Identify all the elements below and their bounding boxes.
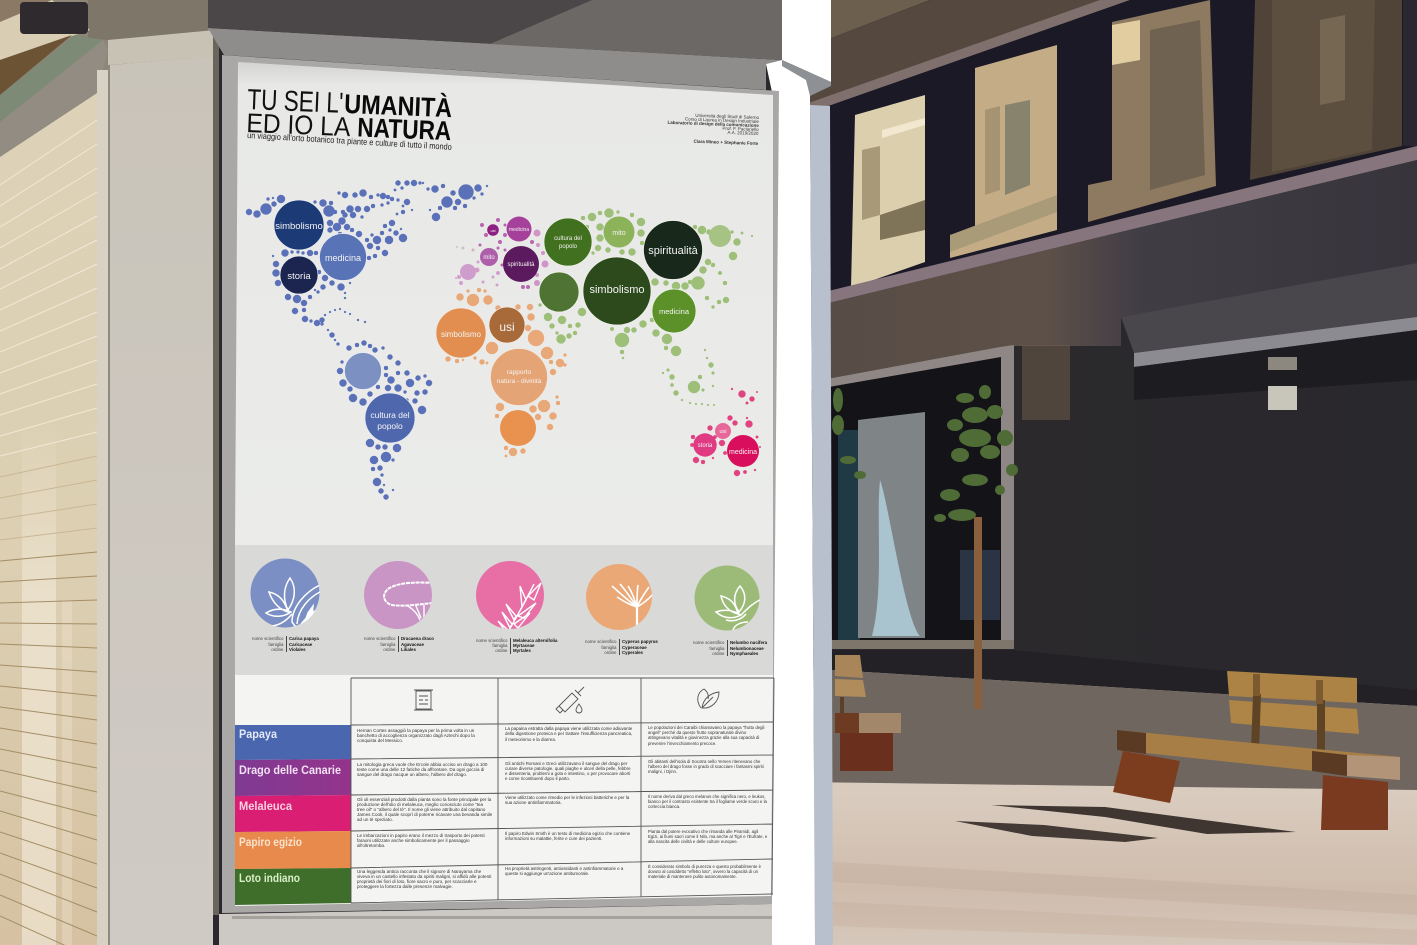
plant data: Violales — [289, 647, 306, 652]
text: papiro simbolismo: alla nascita delle civiltà e delle culture europee. — [648, 839, 738, 844]
Greenland — [426, 184, 488, 221]
text: loto medicina: Ha proprietà astringenti, antiossidanti e antinfiammatorie e a — [505, 866, 624, 871]
plant: drago delle canarie — [364, 561, 434, 652]
row name: loto — [235, 868, 351, 905]
bubble: usi: usi — [490, 228, 496, 233]
text: melaleuca storia: tree oil" o "albero del tè". Il nome gli viene attribuito dal capitano — [357, 807, 486, 812]
bubble: simbolismo — [583, 257, 651, 325]
plant data: ordine — [604, 650, 617, 655]
bubble: simbolismo: simbolismo — [589, 284, 645, 296]
icon: syringe and drop — [556, 687, 584, 713]
icon: papyrus — [586, 564, 653, 632]
text: papiro simbolismo: Pianta dal potere evocativo che rimanda alle Piramidi, agli — [648, 829, 758, 834]
bubble: spiritualità: spiritualità — [507, 262, 535, 268]
text: melaleuca medicina: sua azione antinfiammatoria. — [505, 800, 562, 805]
plant data: Agavaceae — [401, 642, 425, 647]
shutter — [0, 93, 97, 945]
bubble: cultura del popolo: popolo — [377, 421, 403, 431]
text: loto storia: viveva in un castello infestato da spiriti maligni, si affidò alle potenti — [357, 874, 491, 879]
text: drago medicina: e come ricostituenti dopo il parto. — [505, 776, 570, 781]
title: TU SEI L' — [247, 84, 344, 120]
bubble: storia — [280, 256, 318, 294]
title — [246, 84, 453, 146]
bubble: medicina — [320, 234, 366, 280]
shop window — [800, 345, 1014, 649]
canopy — [1121, 263, 1417, 410]
text: papaya storia: Hernan Cortes assaggiò la papaya per la prima volta in un — [357, 728, 475, 733]
subtitle: un viaggio all'orto botanico tra piante e culture di tutto il mondo — [247, 130, 452, 152]
bubble: usi — [489, 307, 525, 343]
bubble: cultura del popolo: popolo — [559, 244, 578, 250]
Europe — [455, 216, 548, 289]
plant data: nome scientifico — [476, 638, 508, 643]
plant data: nome scientifico — [585, 639, 617, 644]
text: loto medicina: queste si aggiunge un'azione antitumorale. — [505, 871, 589, 876]
bench left — [835, 655, 901, 771]
column: simbolismo — [648, 725, 768, 879]
plant: papaya — [250, 558, 320, 652]
text: papaya storia: banchetto di accoglienza organizzato dagli Aztechi dopo la — [357, 733, 475, 738]
text: loto simbolismo: È considerato simbolo di purezza e questo probabilmente è — [648, 864, 762, 869]
table row names — [235, 725, 351, 905]
plant data: Caricaceae — [289, 642, 313, 647]
plant data: Cyperus papyrus — [622, 639, 658, 644]
text: papaya simbolismo: prevenire l'invecchiamento precoce. — [648, 741, 716, 746]
bubble: cultura del popolo — [544, 218, 592, 266]
text: papiro medicina: informazioni su malattie, ferite e cure dei pazienti. — [505, 836, 602, 841]
plant data: famiglia — [709, 646, 725, 651]
text: loto storia: proteggere la fortezza dalle presenze malvagie. — [357, 884, 453, 889]
text: melaleuca storia: produzione dell'olio di melaleuca, meglio conosciuto come "tea — [357, 802, 484, 807]
icon: papaya — [250, 558, 320, 628]
bubble: cultura del popolo: cultura del — [554, 236, 582, 242]
plant data: ordine — [712, 651, 725, 656]
plant data: Myrtales — [513, 648, 531, 653]
bubble: medicina: medicina — [729, 449, 757, 456]
text: drago medicina: Gli antichi Romani e Greci utilizzavano il sangue del drago per — [505, 761, 628, 766]
plant: papiro egizio — [585, 564, 658, 655]
text: papiro storia: Le imbarcazioni in papiro erano il mezzo di trasporto dei potenti — [357, 833, 485, 838]
icon: melaleuca — [476, 561, 544, 632]
row name: melaleuca — [235, 795, 351, 832]
credits: Ciara Mineo + Stephanie Forte — [693, 139, 759, 146]
plant data: Dracaena draco — [401, 636, 434, 641]
bubble: unlabelled — [500, 410, 536, 446]
text: drago storia: sangue del drago nacque un albero, l'albero del drago. — [357, 772, 467, 777]
text: papiro storia: faraoni utilizzate anche simbolicamente per il passaggio — [357, 838, 470, 843]
text: drago storia: teste come una delle 12 fatiche da affrontare. Da ogni goccia di — [357, 767, 484, 772]
bubble: unlabelled — [709, 225, 731, 247]
row name: papaya: Papaya — [239, 727, 277, 741]
bubble: medicina: medicina — [509, 227, 529, 233]
plant data: Myrtaceae — [513, 643, 535, 648]
text: papaya medicina: della digestione proteica e per trattare l'insufficienza pancreatica, — [505, 731, 632, 736]
plant data: Liliales — [401, 647, 416, 652]
credits: Corso di Laurea in Design Industriale — [685, 116, 759, 124]
text: loto simbolismo: materiale di mantenere pulito autonomamente. — [648, 874, 737, 879]
tree — [832, 385, 1018, 709]
plant data: famiglia — [268, 642, 284, 647]
text: papaya simbolismo: angeli" perché da questo frutto sopranaturale divino — [648, 730, 747, 735]
bubble: simbolismo: simbolismo — [441, 330, 482, 339]
credits: A.A. 2019/2020 — [727, 130, 759, 136]
text: melaleuca storia: ad un tè speziato. — [357, 817, 393, 822]
text: melaleuca simbolismo: bianco per il contrasto esistente tra il fogliame verde scuro e la — [648, 799, 768, 804]
row name: papiro — [235, 831, 351, 869]
text: papiro medicina: Il papiro Edwin Smith è un testo di medicina egizio che contiene — [505, 831, 631, 836]
icon: leaves — [698, 689, 719, 708]
bubble: cultura del popolo: cultura del — [370, 410, 410, 420]
title: NATURA — [357, 112, 452, 146]
text: loto simbolismo: dovuto al cosiddetto "effetto loto", ovvero la capacità di un — [648, 869, 759, 874]
bubble: spiritualità — [644, 220, 702, 280]
text: drago simbolismo: Gli abitanti dell'isola di Socotra nello Yemen ritenevano che — [648, 759, 761, 764]
credits — [667, 112, 760, 146]
row name: loto: Loto indiano — [239, 871, 300, 885]
plant data — [585, 639, 658, 655]
credits: Università degli Studi di Salerno — [695, 113, 760, 120]
photo background: street building — [800, 0, 1417, 945]
text: drago medicina: curare diverse patologie, quali piaghe e ulceri della pelle, febbre — [505, 766, 631, 771]
bubble: unlabelled — [460, 264, 476, 280]
icon: dragon tree — [364, 561, 434, 632]
plant data: famiglia — [492, 643, 508, 648]
plant data: Carica papaya — [289, 636, 319, 641]
plant data: Cyperaceae — [622, 645, 647, 650]
poster background — [235, 62, 773, 545]
icon: scroll — [414, 690, 433, 710]
text: melaleuca simbolismo: Il nome deriva dal greco melanos che significa nero, e leukos, — [648, 794, 766, 799]
South America — [337, 340, 432, 500]
text: melaleuca storia: Gli oli essenziali prodotti dalla pianta sono la fonte principale per la — [357, 797, 492, 802]
plant data: Nelumbonaceae — [730, 646, 764, 651]
plant data: nome scientifico — [252, 636, 284, 641]
bubble: medicina: medicina — [325, 253, 361, 263]
upper floor windows — [800, 0, 1417, 305]
text: papiro storia: all'oltretomba. — [357, 843, 385, 848]
Africa — [436, 288, 566, 457]
bubble: usi: usi — [719, 429, 727, 435]
text: papaya storia: conquista del Messico. — [357, 738, 403, 743]
plant data: nome scientifico — [364, 636, 396, 641]
text: melaleuca simbolismo: corteccia bianca. — [648, 804, 680, 809]
text: papaya medicina: La papaina estratta dalla papaya viene utilizzata come adiuvante — [505, 726, 633, 731]
bubble: simbolismo — [274, 200, 324, 250]
bubble: simbolismo: simbolismo — [275, 221, 323, 232]
plant data: nome scientifico — [693, 640, 725, 645]
North America — [246, 180, 424, 346]
row name: drago — [235, 759, 351, 796]
credits: Prof. F. Paciariello — [722, 126, 759, 132]
world map bubbles — [246, 180, 761, 500]
bubble: cultura del popolo — [365, 393, 415, 443]
bubble: usi: usi — [499, 320, 515, 334]
poster — [235, 62, 774, 906]
text: melaleuca storia: James Cook, il quale scoprì di poterne ricavare una bevanda simile — [357, 812, 493, 817]
grey plant band — [235, 545, 773, 675]
plant data — [364, 636, 434, 652]
title: ED IO LA — [246, 108, 351, 142]
text: papiro simbolismo: Egizi, ai fiumi sacri come il Nilo, ma anche al Tigri e l'Eufrate, e — [648, 834, 768, 839]
text: drago storia: La mitologia greca vuole che Ercole abbia ucciso un drago a 100 — [357, 762, 488, 767]
text: papaya simbolismo: Le popolazioni dei Caraibi chiamavano la papaya "frutto degli — [648, 725, 764, 730]
bubble: mito: mito — [483, 255, 495, 261]
text: papaya simbolismo: attingevano vitalità e giovinezza grazie alla sua capacità di — [648, 735, 759, 740]
poster frame — [222, 55, 779, 913]
bubble: rapporto natura-divinità: rapporto — [507, 369, 531, 376]
plant data: Nymphaeales — [730, 651, 759, 656]
text: loto storia: Una leggenda antica racconta che il signore di Narayama che — [357, 869, 482, 874]
text: papaya medicina: il meteorismo e la diarrea. — [505, 737, 556, 742]
table — [235, 678, 774, 905]
plant data: famiglia — [380, 642, 396, 647]
plant: loto indiano — [693, 566, 768, 656]
bubble: medicina — [652, 289, 696, 333]
bubble: simbolismo — [436, 308, 486, 358]
Oceania — [690, 388, 761, 476]
row name: melaleuca: Melaleuca — [239, 799, 292, 813]
bench right — [1113, 671, 1400, 830]
bubble: mito: mito — [612, 230, 626, 237]
text: drago medicina: e dissenteria, problemi a gola e intestino, o per provocare aborti — [505, 771, 630, 776]
plant data: Cyperales — [622, 650, 644, 655]
bubble: rapporto natura-divinità — [490, 348, 548, 406]
row name: papaya — [235, 725, 351, 760]
plant data: ordine — [383, 647, 396, 652]
bubble: rapporto natura-divinità: natura - divinità — [497, 378, 542, 385]
plant data: ordine — [495, 648, 508, 653]
plant data: famiglia — [601, 645, 617, 650]
icon: lotus — [694, 566, 764, 630]
Asia — [538, 208, 753, 406]
plant data — [252, 636, 319, 652]
column: medicina — [505, 726, 633, 876]
bubble: medicina: medicina — [659, 307, 690, 316]
kiosk structure — [0, 0, 833, 945]
plant: melaleuca — [476, 561, 558, 654]
plant data: ordine — [271, 647, 284, 652]
row name: papiro: Papiro egizio — [239, 835, 302, 849]
bubble: storia: storia — [698, 443, 713, 449]
plant data: Nelumbo nucifera — [730, 640, 768, 645]
row name: drago: Drago delle Canarie — [239, 763, 341, 777]
text: drago simbolismo: maligni, i Djinn. — [648, 769, 677, 774]
plant data: Melaleuca alternifolia — [513, 638, 558, 643]
bubble: storia: storia — [287, 271, 311, 282]
bubble: unlabelled — [344, 352, 382, 390]
text: drago simbolismo: l'albero del drago fosse in grado di scacciare i fantasmi spiriti — [648, 764, 764, 769]
bubble: spiritualità: spiritualità — [648, 245, 699, 257]
plant data — [693, 640, 768, 656]
bubble: unlabelled — [539, 272, 579, 312]
text: melaleuca medicina: Viene utilizzato come rimedio per le infezioni batteriche e per la — [505, 795, 630, 800]
pavement — [800, 668, 1417, 945]
title: UMANITÀ — [344, 88, 453, 123]
credits: Laboratorio di design della comunicazione — [667, 120, 759, 128]
plant data — [476, 638, 558, 654]
bubble: mito — [604, 216, 634, 248]
lower poster sheet — [235, 675, 773, 906]
column: storia — [357, 728, 493, 889]
text: loto storia: proprietà dei fiori di loto, fiore sacro e puro, per scacciarle e — [357, 879, 477, 884]
